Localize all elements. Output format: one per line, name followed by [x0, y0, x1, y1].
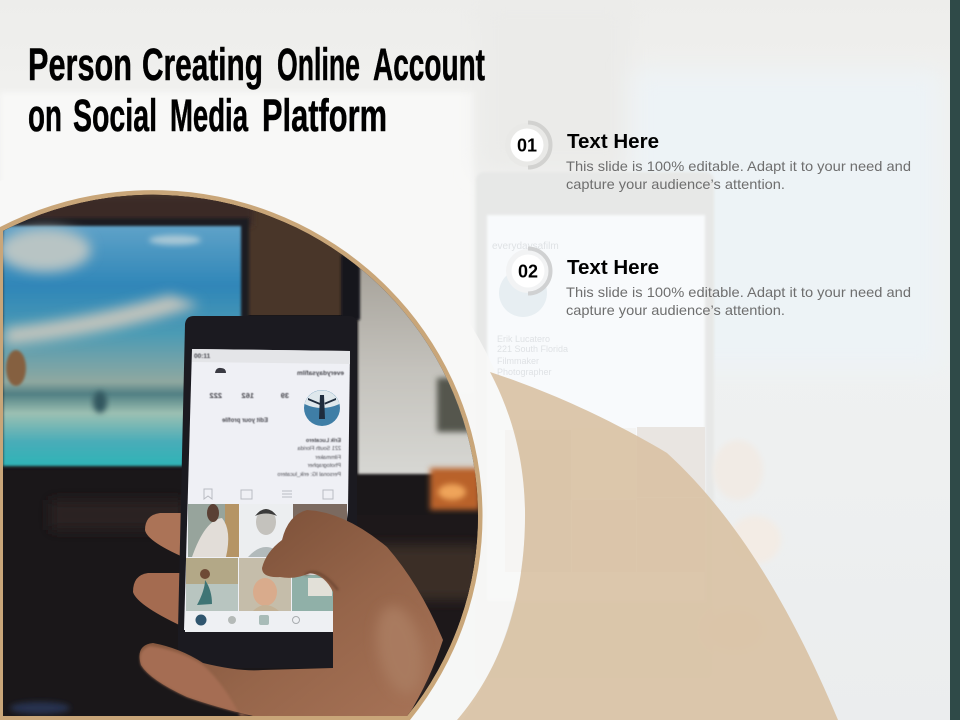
badge 01 — [505, 122, 550, 168]
title: Platform — [262, 90, 387, 141]
phone: Personal IG: erik_lucatero — [277, 472, 341, 478]
title: Media — [170, 90, 249, 141]
title: Account — [373, 39, 485, 90]
badge 01: 01 — [517, 136, 537, 156]
faded phone in background: Photographer — [497, 367, 552, 377]
phone: 162 — [241, 391, 254, 400]
phone: Photographer — [308, 463, 341, 469]
faded phone in background: everydaysafilm — [492, 241, 559, 252]
faded phone in background: Filmmaker — [497, 356, 539, 366]
blurred monitor — [0, 218, 249, 468]
title: Person — [28, 39, 132, 90]
phone screen — [184, 349, 350, 632]
phone: Erik Lucatero — [305, 438, 341, 444]
title — [28, 39, 485, 141]
faded phone in background — [476, 172, 714, 680]
text block 01: capture your audience’s attention. — [566, 176, 785, 192]
badge 02 — [506, 248, 550, 294]
phone: Filmmaker — [315, 455, 341, 461]
badge 02: 02 — [518, 262, 538, 282]
text block 01: This slide is 100% editable. Adapt it to your need and — [566, 158, 911, 174]
phone: 39 — [281, 391, 289, 400]
title: Social — [73, 90, 157, 141]
phone: 221 South Florida — [297, 446, 341, 452]
tan curved shape — [457, 372, 838, 720]
circular photo: person holding phone — [0, 190, 483, 720]
title: Creating — [142, 39, 263, 90]
phone: 00:11 — [194, 353, 211, 360]
text block 01 — [566, 131, 911, 192]
title: on — [28, 90, 62, 141]
text block 02 — [566, 257, 911, 318]
photo grid — [186, 504, 347, 611]
title: Online — [277, 39, 360, 90]
thumb and hand — [140, 510, 443, 716]
tan ring — [0, 190, 483, 720]
phone — [178, 316, 357, 632]
blurred wall on right — [358, 258, 483, 474]
text block 02: This slide is 100% editable. Adapt it to your need and — [566, 284, 911, 300]
text block 01: Text Here — [567, 131, 659, 153]
phone: 222 — [209, 391, 222, 400]
phone: Edit your profile — [221, 418, 268, 424]
phone: everydaysafilm — [297, 370, 344, 377]
faded phone in background: 221 South Florida — [497, 344, 568, 354]
fingers behind phone — [133, 513, 181, 624]
tan bottom and left edge strips — [0, 227, 410, 720]
text block 02: Text Here — [567, 257, 659, 279]
photo backdrop — [3, 190, 483, 720]
faded phone in background: Erik Lucatero — [497, 334, 550, 344]
right dark strip — [950, 0, 960, 720]
text block 02: capture your audience’s attention. — [566, 302, 785, 318]
white halo around circular photo — [0, 148, 525, 720]
